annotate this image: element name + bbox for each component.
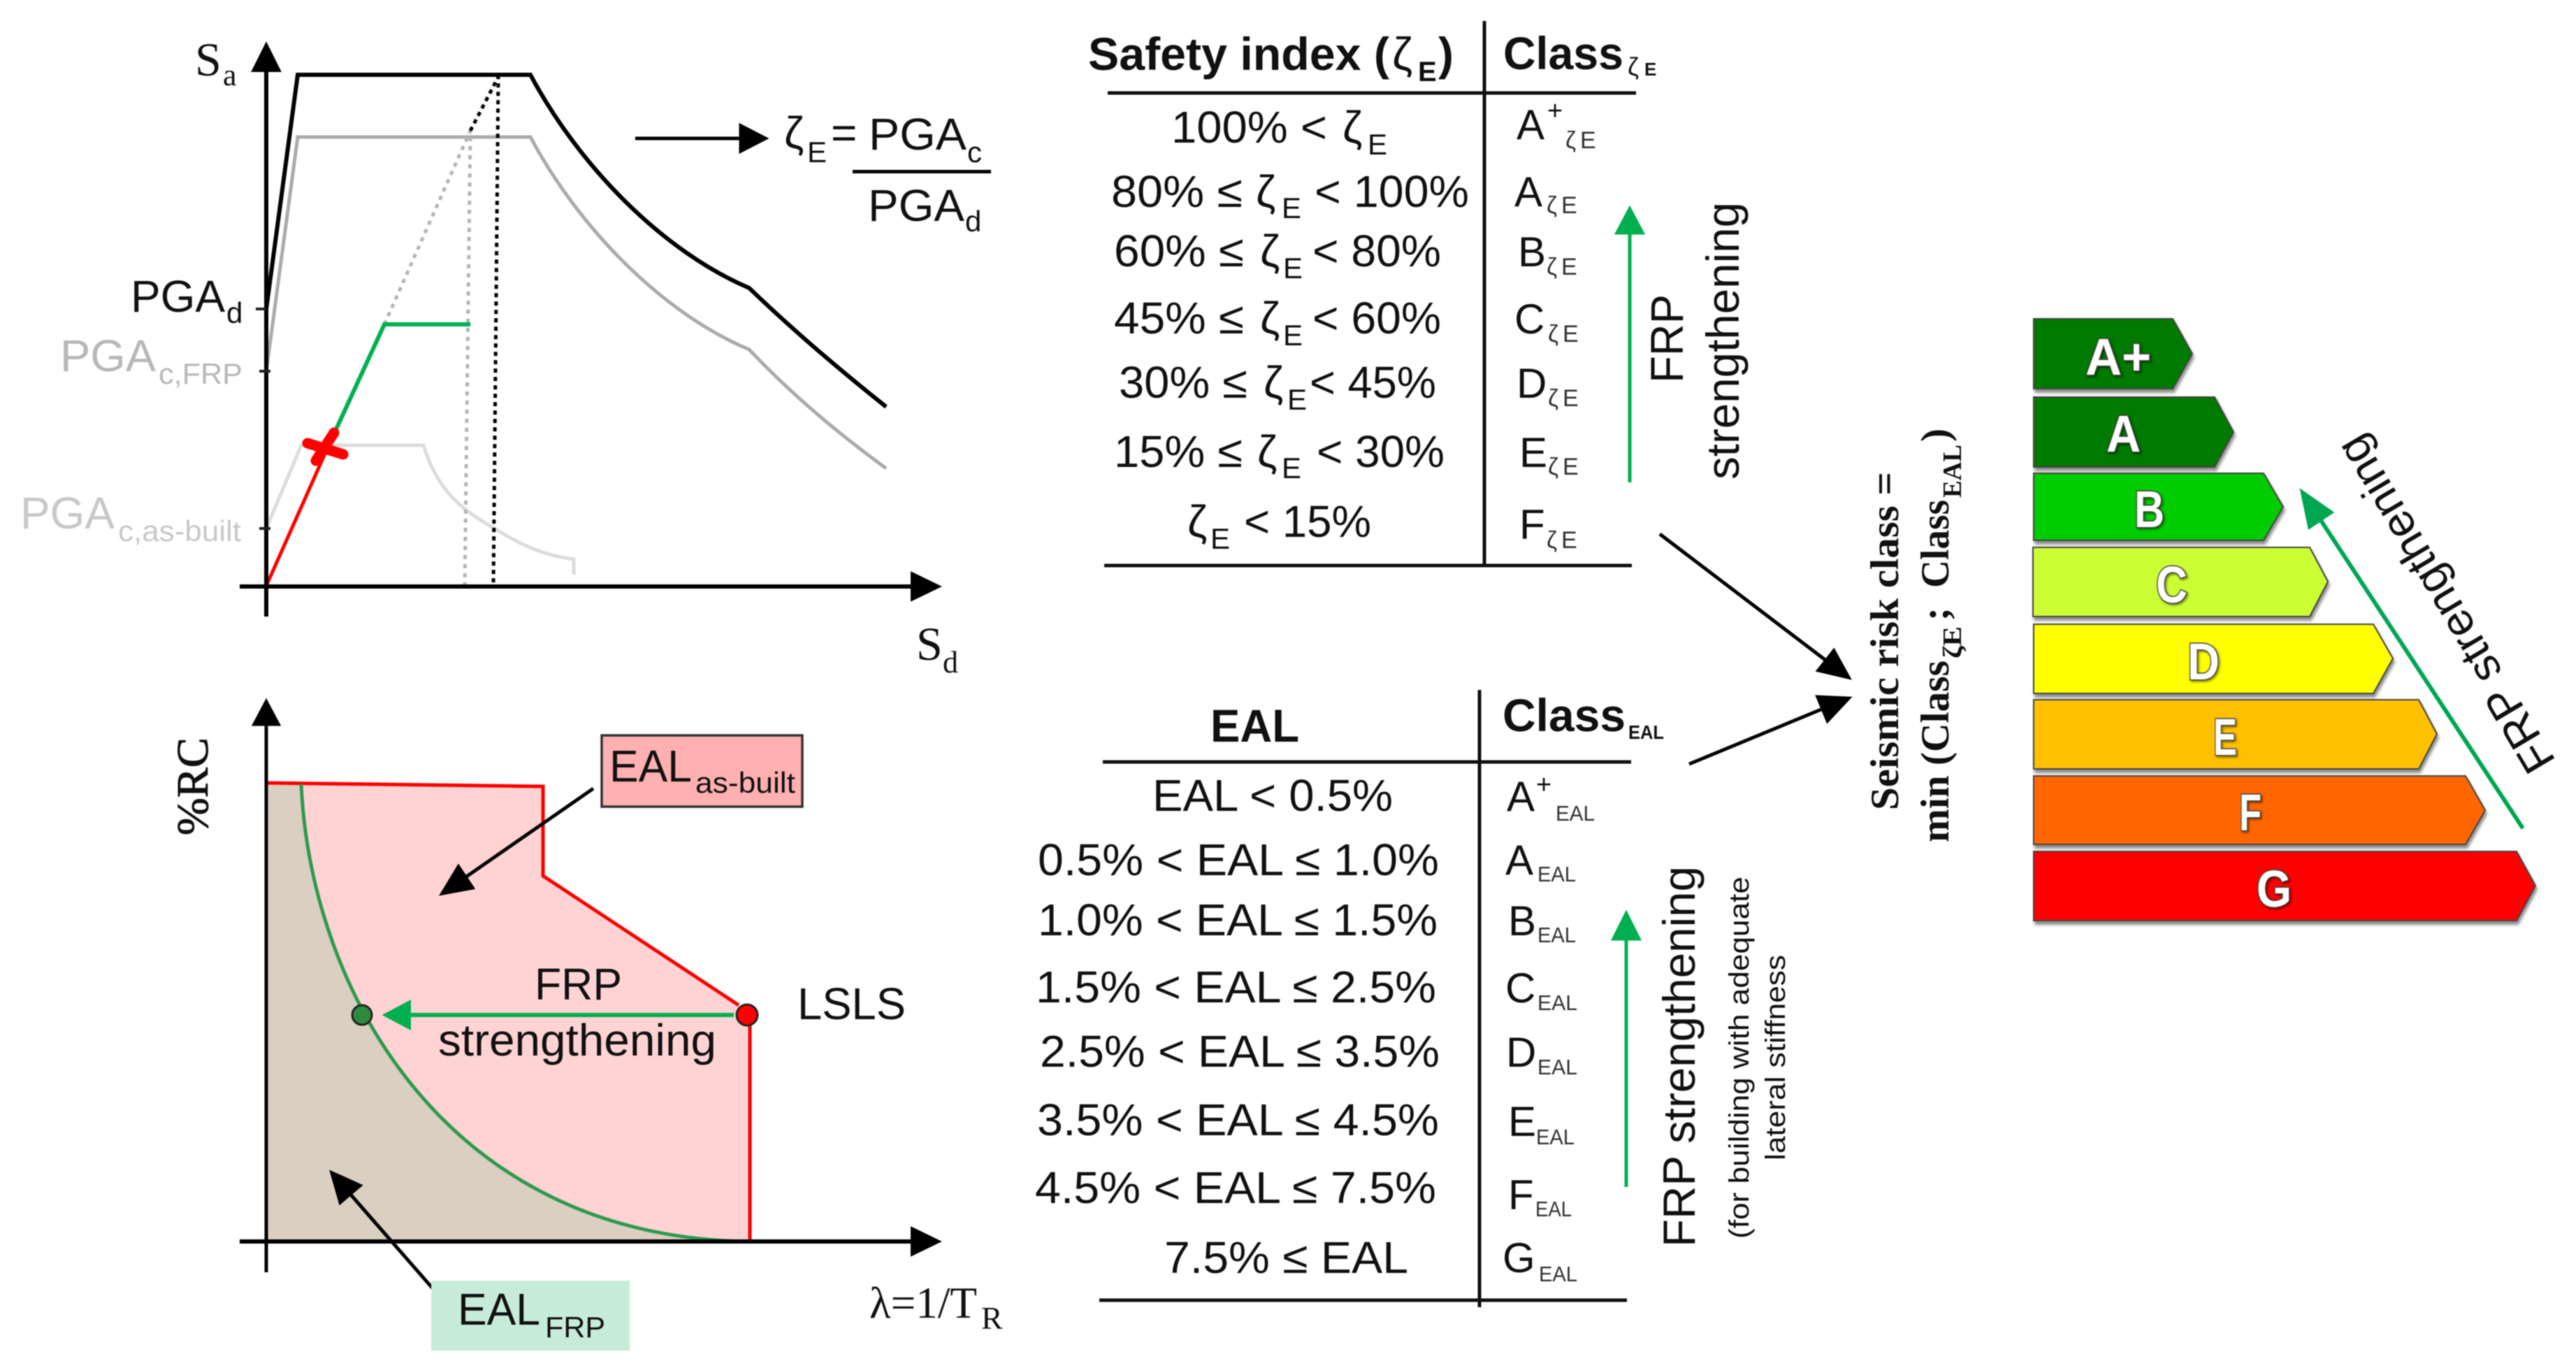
row: 30%: E (1287, 383, 1307, 416)
row: D: 2.5% < EAL ≤ 3.5% (1040, 1026, 1440, 1077)
capacity line: red as-built segment (266, 447, 328, 586)
label: PGAd: d (226, 296, 243, 329)
text block: seismic risk class formula: ; (1913, 607, 1958, 621)
bar: B: B (2134, 480, 2164, 538)
label: Sa (195, 33, 237, 92)
label: FRP strengthening: FRP (535, 959, 622, 1009)
label: PGAd: PGA (131, 271, 225, 322)
row: below 15%: ζ (1547, 527, 1557, 554)
note: building stiffness condition: (for building with adequate (1724, 877, 1755, 1239)
header: class: Class (1503, 27, 1623, 79)
row: 100% (1171, 96, 1596, 161)
label: PGAc,as-built: c,as-built (118, 514, 241, 547)
row: 60%: 60% ≤ (1114, 226, 1244, 276)
row: B: EAL (1537, 923, 1576, 947)
panel: EAL table (1035, 689, 1791, 1307)
point: FRP LSLS (352, 1005, 372, 1025)
row: 100%: ζ (1565, 127, 1576, 154)
formula: safety index: PGA (869, 109, 967, 159)
formula: safety index: = (831, 108, 857, 158)
row: A: EAL (1537, 862, 1576, 886)
icon: red failure cross (307, 433, 343, 461)
row: 15%: ζ (1257, 426, 1277, 477)
text block: seismic risk class formula: EAL (1938, 445, 1967, 498)
row: 60%: < 80% (1312, 226, 1441, 276)
row: below 15%: ζ (1187, 496, 1207, 547)
row: 80%: ζ (1547, 192, 1557, 219)
row: 60%: E (1283, 252, 1303, 285)
row: 30% (1119, 357, 1579, 416)
header: safety index: ζ (1392, 28, 1412, 80)
text block: seismic risk class formula: Seismic risk class = (1863, 472, 1907, 810)
row: 30%: < 45% (1310, 357, 1436, 408)
row: G: G (1503, 1234, 1535, 1281)
label: Sd: d (943, 645, 958, 679)
header: class: ζ (1628, 52, 1639, 81)
row: below 15%: E (1210, 522, 1230, 555)
note: building stiffness condition: lateral stiffness (1760, 955, 1791, 1160)
text block: seismic risk class formula: Class (1913, 500, 1958, 588)
panel: safety index table (1088, 21, 1749, 566)
callout: EAL as-built: as-built (695, 766, 795, 799)
row: F: EAL (1535, 1197, 1572, 1221)
panel: seismic risk class scale (2033, 319, 2565, 921)
row: 45%: ζ (1260, 293, 1280, 343)
row: C (1036, 962, 1577, 1015)
row: 45%: < 60% (1312, 293, 1441, 343)
row: 100%: + (1547, 96, 1563, 126)
point: as-built LSLS (737, 1005, 758, 1025)
area: EAL as-built (268, 783, 750, 1241)
row: 45%: 45% ≤ (1114, 293, 1244, 343)
axis ticks (256, 309, 270, 528)
formula: safety index: c (967, 136, 982, 168)
area: EAL FRP (268, 783, 748, 1241)
text block: seismic risk class formula: ζE (1938, 626, 1967, 658)
row: 100%: 100% < (1171, 102, 1327, 152)
label: FRP strengthening diagonal: FRP strengthening (2325, 427, 2565, 782)
row: below 15%: F (1519, 501, 1545, 548)
dotted guide lines, gray (384, 131, 470, 586)
formula: safety index: d (965, 205, 981, 238)
label: PGAc,as-built: PGA (20, 488, 115, 538)
row: 15%: E (1563, 454, 1579, 480)
row: 60%: ζ (1547, 254, 1557, 280)
callout: EAL as-built: EAL (609, 741, 692, 791)
bar: D: D (2187, 633, 2220, 691)
row: A+: EAL (1556, 801, 1595, 826)
row: C: EAL (1537, 991, 1577, 1015)
arrow: FRP strengthening up (1617, 209, 1642, 482)
bar: C (2033, 547, 2328, 617)
arrow: to as-built area (442, 789, 593, 893)
row: A: A (1505, 837, 1533, 884)
formula: safety index: PGA (868, 180, 964, 231)
header: safety index: E (1418, 57, 1437, 87)
row: 15%: ζ (1548, 454, 1558, 480)
row: 60%: E (1561, 254, 1577, 280)
row: 30%: ζ (1548, 385, 1558, 412)
bar: A+ (2034, 319, 2192, 389)
callout: EAL FRP (431, 1281, 630, 1351)
row: 45%: E (1563, 321, 1579, 347)
label: LSLS: LSLS (797, 979, 906, 1029)
row: A: 0.5% < EAL ≤ 1.0% (1038, 835, 1439, 885)
formula: safety index: ζ (784, 108, 804, 158)
panel: expected annual loss chart (168, 702, 1003, 1351)
curve: FRP capacity spectrum, gray (266, 137, 886, 468)
arrow: to FRP area (332, 1173, 442, 1299)
bar: G: G (2257, 860, 2292, 918)
label: PGAc,FRP (60, 331, 243, 390)
header: EAL: EAL (1210, 700, 1299, 751)
x axis arrow (240, 1230, 937, 1253)
bar: F (2034, 776, 2485, 844)
row: 80%: E (1561, 192, 1577, 219)
row: 80%: ζ (1256, 166, 1275, 217)
row: 80%: 80% ≤ (1111, 166, 1243, 217)
arrow: FRP strengthening diagonal (2303, 493, 2523, 828)
label: FRP strengthening vertical (1641, 202, 1749, 480)
row: 60% (1114, 226, 1577, 285)
bar: B (2034, 473, 2283, 540)
row: E: 3.5% < EAL ≤ 4.5% (1037, 1095, 1439, 1145)
header: class: Class (1503, 689, 1626, 741)
header: safety index: Safety index ( (1088, 28, 1389, 80)
row: 100%: E (1580, 127, 1596, 154)
header: class: E (1644, 59, 1656, 80)
row: C: C (1505, 965, 1535, 1011)
label: return period axis (869, 1278, 1003, 1336)
bar: A (2034, 397, 2234, 467)
row: 30%: ζ (1264, 357, 1283, 408)
dotted guide lines, black (470, 77, 498, 584)
formula: safety index: E (807, 136, 827, 168)
bar: A+: A+ (2085, 328, 2151, 386)
arrow: safety class to seismic class (1660, 534, 1848, 677)
outline: as-built EAL curve (268, 783, 750, 1241)
outline: FRP EAL curve (301, 784, 748, 1241)
row: B (1038, 895, 1576, 947)
label: PGAc,FRP: c,FRP (159, 357, 243, 390)
bar: E (2034, 700, 2437, 769)
row: 15%: E (1519, 429, 1547, 476)
row: 45%: ζ (1548, 321, 1558, 347)
label: FRP strengthening vertical: FRP (1641, 294, 1693, 383)
table rules (1104, 21, 1636, 566)
arrow to safety index formula (635, 126, 765, 151)
bar: F: F (2239, 784, 2262, 842)
label: PGAc,as-built (20, 488, 241, 547)
row: 80%: E (1282, 192, 1301, 224)
row: 45% (1114, 293, 1579, 352)
label: PGAc,FRP: PGA (60, 331, 156, 381)
table rules (1099, 690, 1631, 1307)
row: E (1037, 1095, 1575, 1149)
label: Sd: S (916, 617, 943, 670)
row: D: D (1506, 1029, 1536, 1076)
label: FRP strengthening vertical: strengthening (1697, 202, 1749, 480)
row: 30%: E (1563, 385, 1579, 412)
label: FRP strengthening: strengthening (438, 1015, 716, 1065)
row: 100%: E (1368, 128, 1387, 161)
x axis arrow (240, 575, 937, 598)
text block: seismic risk class formula: ) (1913, 429, 1958, 442)
row: A+: EAL < 0.5% (1152, 770, 1393, 821)
bar: G (2034, 851, 2535, 921)
row: 45%: C (1514, 296, 1544, 343)
row: 80%: A (1514, 168, 1542, 215)
row: 100%: ζ (1343, 102, 1362, 152)
row: D: EAL (1537, 1055, 1577, 1079)
bar: E: E (2213, 708, 2237, 766)
row: below 15%: < 15% (1244, 496, 1371, 547)
row: F (1035, 1162, 1572, 1221)
row: below 15%: E (1561, 527, 1577, 554)
row: 45%: E (1283, 319, 1303, 352)
label: return period axis: λ=1/T (869, 1278, 977, 1327)
row: 30%: 30% ≤ (1119, 357, 1247, 408)
text block: seismic risk class formula: min (Class (1913, 661, 1958, 842)
row: 100%: A (1517, 101, 1544, 148)
row: 15%: 15% ≤ (1114, 426, 1243, 477)
row: B: B (1508, 898, 1536, 944)
callout: EAL as-built (602, 735, 802, 807)
y axis arrow (254, 702, 278, 1272)
arrow: EAL class to seismic class (1689, 697, 1848, 764)
label: FRP strengthening (438, 959, 716, 1065)
header: safety index: ) (1438, 28, 1454, 80)
row: G: EAL (1539, 1262, 1577, 1286)
arrow: FRP strengthening up (1614, 914, 1639, 1187)
row: 60%: B (1518, 229, 1546, 275)
label: Sd (916, 617, 958, 679)
row: D (1040, 1026, 1577, 1079)
arrow: FRP strengthening (386, 1003, 734, 1027)
row: C: 1.5% < EAL ≤ 2.5% (1036, 962, 1436, 1012)
row: F: F (1508, 1172, 1534, 1218)
bar: D (2034, 624, 2393, 693)
label: return period axis: R (981, 1300, 1003, 1336)
panel: capacity spectrum chart (20, 33, 991, 679)
row: A+: A (1507, 773, 1535, 820)
row: 80%: < 100% (1315, 166, 1469, 217)
row: G: 7.5% ≤ EAL (1164, 1232, 1408, 1283)
bar: A: A (2106, 405, 2141, 463)
row: 15%: < 30% (1317, 426, 1445, 477)
text block: seismic risk class formula (1863, 429, 1967, 842)
row: 30%: D (1517, 360, 1547, 407)
row: G (1164, 1232, 1577, 1286)
note: building stiffness condition (1724, 877, 1791, 1239)
bar: C: C (2156, 556, 2187, 614)
label: FRP strengthening vertical: FRP strengthening (1654, 866, 1705, 1247)
row: A+ (1152, 770, 1595, 826)
row: E: E (1508, 1098, 1536, 1145)
callout: EAL FRP: EAL (458, 1284, 540, 1334)
label: Sa: a (223, 58, 237, 92)
callout: EAL FRP: FRP (545, 1311, 605, 1344)
row: B: 1.0% < EAL ≤ 1.5% (1038, 895, 1438, 945)
label: %RC: %RC (168, 737, 217, 835)
label: Sa: S (195, 33, 222, 86)
row: 15% (1114, 426, 1579, 484)
row: E: EAL (1536, 1125, 1575, 1149)
row: 80% (1111, 166, 1577, 224)
capacity line: green FRP segment (328, 324, 470, 447)
row: 60%: ζ (1260, 226, 1280, 276)
row: A (1038, 835, 1576, 886)
row: below 15% (1187, 496, 1577, 555)
formula: safety index (784, 108, 991, 238)
row: A+: + (1536, 770, 1551, 800)
curve: demand spectrum, black (266, 75, 886, 407)
row: F: 4.5% < EAL ≤ 7.5% (1035, 1162, 1436, 1213)
row: 15%: E (1282, 452, 1301, 484)
curve: as-built spectrum, light gray (266, 445, 574, 575)
header: class: EAL (1628, 721, 1664, 743)
y axis arrow (254, 46, 278, 617)
